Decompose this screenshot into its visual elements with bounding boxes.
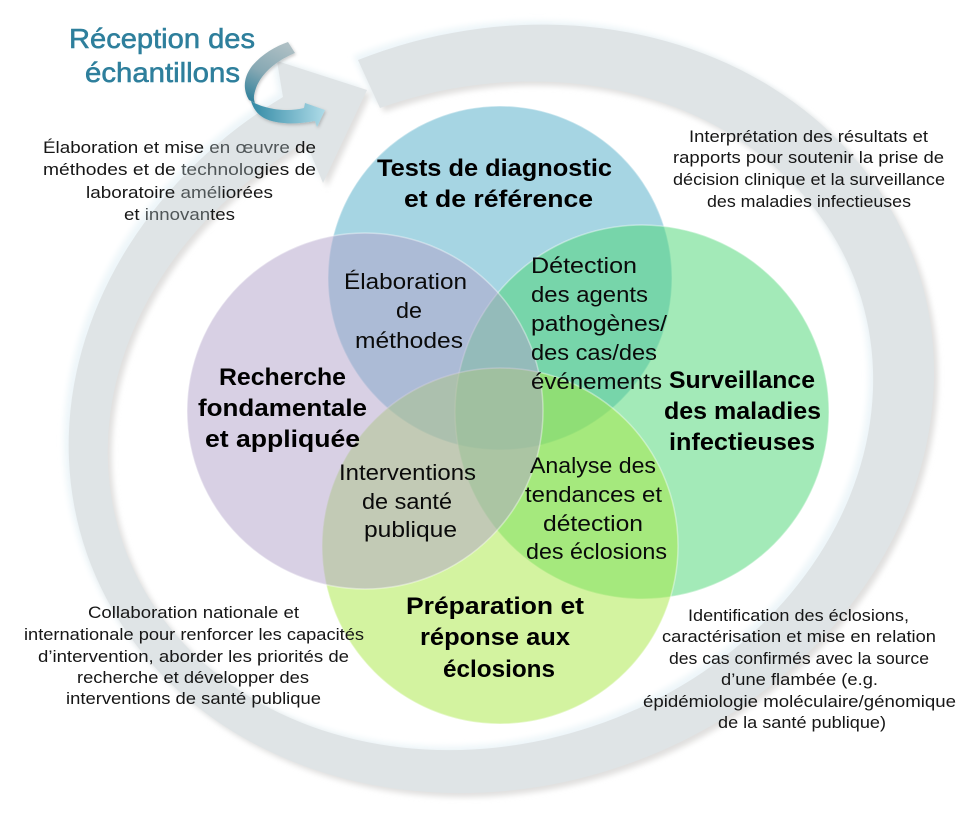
circle: outbreak preparedness [322, 368, 678, 724]
label: diagnostic and reference tests: Tests de diagnostic [377, 155, 612, 182]
overlap label: method development: méthodes [355, 328, 463, 353]
label: diagnostic and reference tests: et de référence [404, 186, 593, 213]
text: collaboration note: internationale pour renforcer les capacités [24, 626, 364, 644]
text: collaboration note: interventions de santé publique [66, 690, 321, 708]
label: outbreak preparedness and response: Préparation et [406, 593, 584, 620]
overlap label: pathogen detection: Détection [531, 253, 637, 278]
circle: surveillance [455, 225, 829, 599]
text: method development note: méthodes et de technolo gies de [43, 161, 316, 179]
circle: research [187, 233, 543, 589]
icon: curved teal arrow [245, 42, 325, 127]
heading: sample reception: échantillons [85, 57, 240, 88]
text: method development note: Élaboration et mise en œuvre de [43, 138, 316, 157]
label: outbreak preparedness and response: éclosions [443, 656, 555, 683]
heading: sample reception [69, 23, 255, 88]
text: outbreak identification note: de la santé publique) [718, 714, 886, 732]
overlap label: pathogen detection [531, 253, 668, 394]
text: collaboration note: Collaboration nationale et [88, 604, 299, 622]
overlap label: method development: Élaboration [344, 269, 467, 294]
overlap label: trend analysis: tendances et [525, 482, 663, 507]
overlap label: method development [344, 269, 467, 353]
heading: sample reception: Réception des [69, 23, 255, 54]
text: results interpretation note: décision clinique et la surveillance [673, 171, 945, 189]
overlap label: public health interventions: publique [364, 517, 457, 542]
text: collaboration note: recherche et développer des [77, 669, 309, 687]
label: basic and applied research [198, 364, 367, 453]
text: outbreak identification note [643, 607, 956, 732]
overlap label: trend analysis: Analyse des [530, 453, 656, 478]
text: collaboration note [24, 604, 364, 708]
text: method development note: laboratoire amél iorées [86, 184, 273, 202]
label: diagnostic and reference tests [377, 155, 612, 213]
overlap label: trend analysis: des éclosions [526, 539, 667, 564]
text: outbreak identification note: des cas confirmés avec la source [669, 650, 929, 668]
venn diagram circles [187, 106, 829, 724]
text: results interpretation note [673, 128, 945, 211]
overlap label: pathogen detection: pathogènes/ [531, 311, 668, 336]
label: basic and applied research: Recherche [219, 364, 346, 391]
overlap label: method development: de [396, 298, 422, 323]
text: method development note: et innovan tes [124, 206, 235, 224]
text: collaboration note: d’intervention, aborder les priorités de [38, 648, 349, 666]
overlap label: public health interventions: Interventions [339, 460, 476, 485]
text: results interpretation note: Interprétation des résultats et [689, 128, 928, 146]
overlap label: pathogen detection: des agents [531, 282, 648, 307]
label: infectious disease surveillance: des maladies [664, 398, 821, 425]
label: infectious disease surveillance: infectieuses [669, 429, 815, 456]
label: outbreak preparedness and response: réponse aux [420, 624, 570, 651]
overlap label: pathogen detection: événements [531, 369, 662, 394]
overlap label: trend analysis: détection [543, 511, 643, 536]
text: method development note [43, 138, 316, 224]
text: outbreak identification note: d’une flambée (e.g. [721, 671, 878, 689]
text: outbreak identification note: Identification des éclosions, [688, 607, 909, 625]
text: outbreak identification note: caractérisation et mise en relation [662, 628, 936, 646]
label: basic and applied research: et appliquée [205, 426, 360, 453]
label: infectious disease surveillance: Surveillance [669, 367, 815, 394]
label: outbreak preparedness and response [406, 593, 584, 683]
label: basic and applied research: fondamentale [198, 395, 367, 422]
overlap label: public health interventions: de santé [362, 489, 452, 514]
label: infectious disease surveillance [664, 367, 821, 456]
text: outbreak identification note: épidémiologie moléculaire/génomique [643, 693, 956, 711]
text: results interpretation note: rapports pour soutenir la prise de [673, 149, 944, 167]
overlap label: public health interventions [339, 460, 476, 542]
overlap label: trend analysis [525, 453, 667, 564]
text: results interpretation note: des maladies infectieuses [707, 193, 911, 211]
overlap label: pathogen detection: des cas/des [531, 340, 657, 365]
circle: diagnostic tests [328, 106, 672, 450]
